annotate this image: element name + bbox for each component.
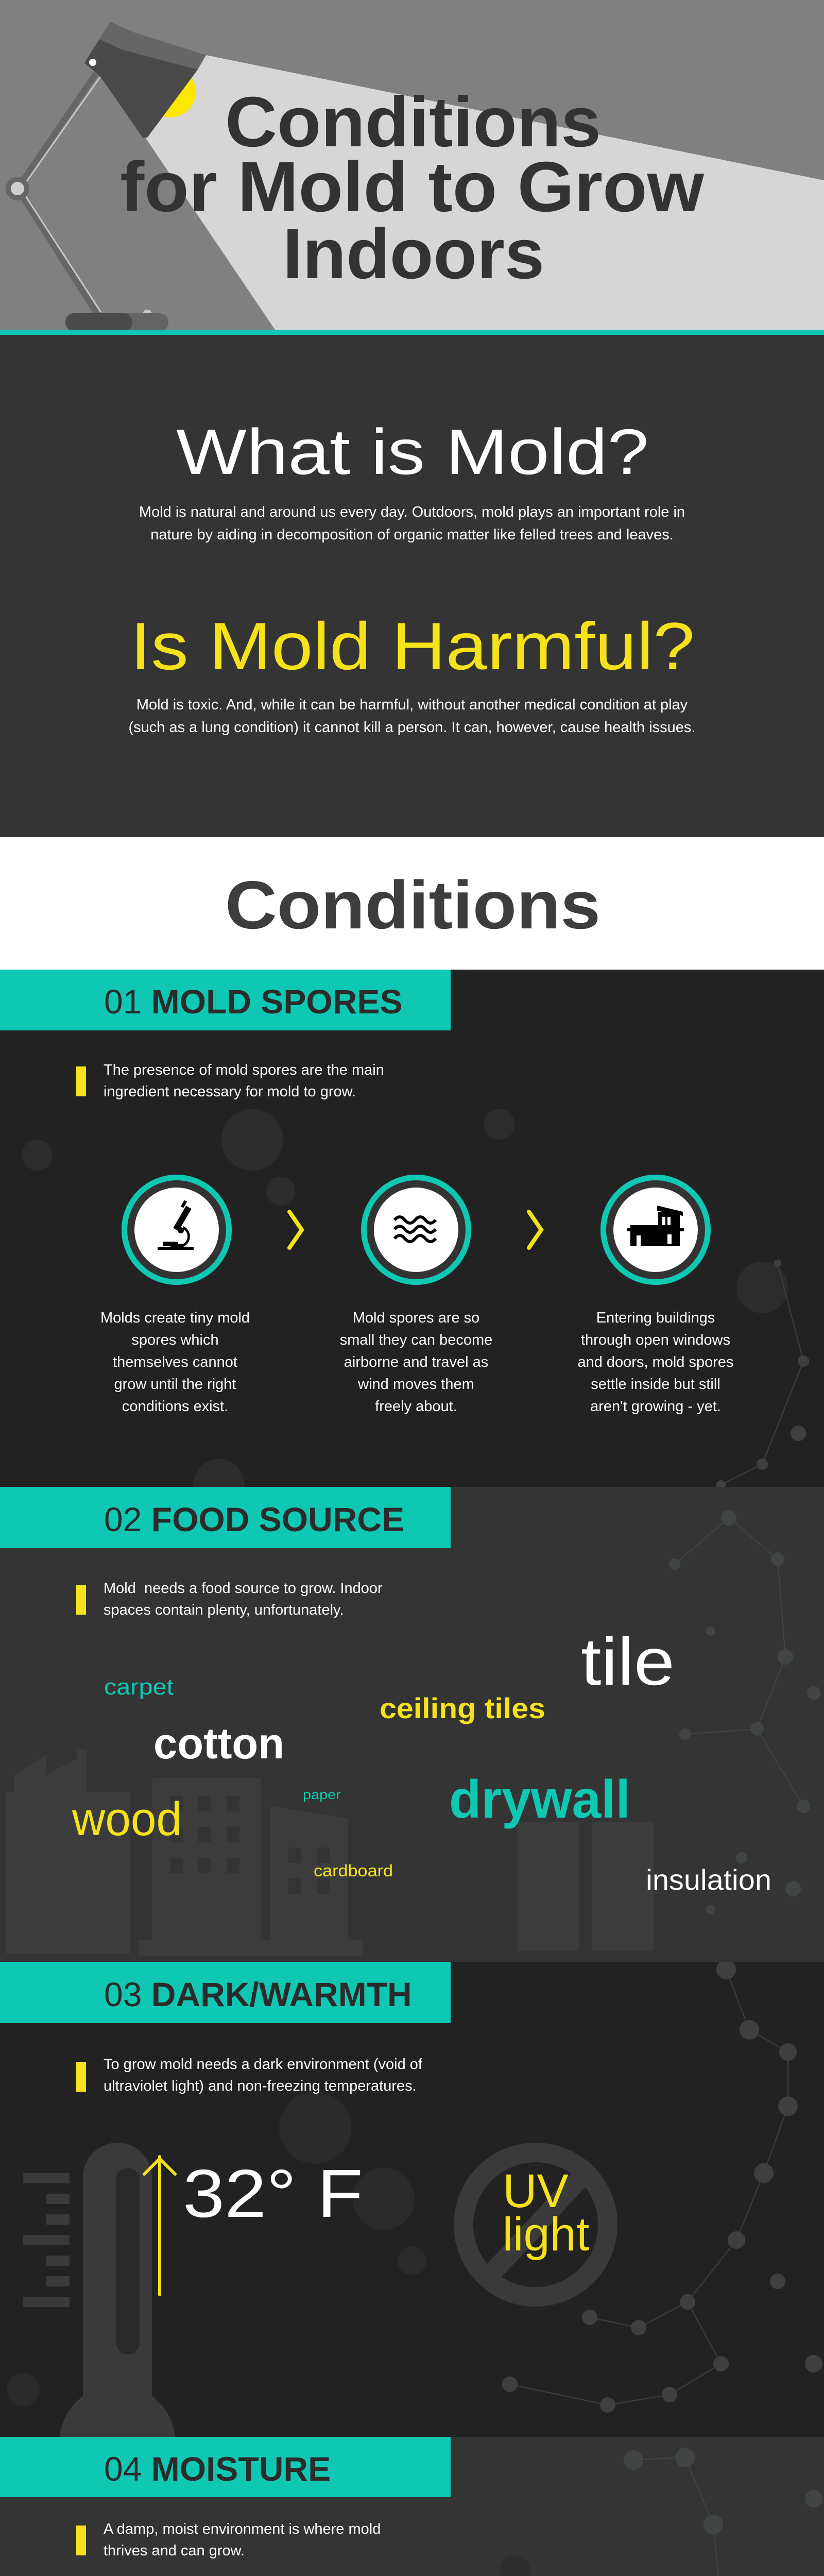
panel: 01 mold spores [0,970,824,1487]
caption 1: themselves cannot [113,1354,237,1370]
caption 1: spores which [131,1332,219,1348]
text: is mold harmful: Mold is toxic. And, while it can be harmful, without another medical condition at play [136,697,688,713]
description [76,1062,384,1100]
word cloud: paper [303,1787,341,1802]
caption 3: through open windows [581,1332,730,1348]
panel: 02 food source [0,1487,824,1962]
conditions heading: Conditions [225,867,600,943]
heading bar: 04 MOISTURE [104,2450,331,2488]
caption 2: Mold spores are so [353,1310,479,1326]
intro panel [0,335,824,837]
caption 1: grow until the right [114,1376,236,1393]
caption 3: Entering buildings [596,1310,715,1326]
text: what is mold: Mold is natural and around us every day. Outdoors, mold plays an important role in [139,504,685,520]
panel: 03 dark/warmth [0,1962,824,2437]
temperature: 32° F [183,2156,363,2231]
icon: no UV: UV [503,2165,569,2217]
caption 2: airborne and travel as [344,1354,488,1370]
title: Conditions [225,82,601,162]
heading bar [0,1487,451,1548]
title [120,82,705,294]
caption 2: wind moves them [358,1376,474,1393]
heading: is mold harmful: Is Mold Harmful? [130,608,695,684]
text: is mold harmful: (such as a lung condition) it cannot kill a person. It can, however, cause health issues. [128,719,695,736]
word cloud: insulation [646,1863,771,1896]
heading bar: 01 MOLD SPORES [104,982,402,1021]
word cloud: tile [581,1624,675,1699]
heading bar: 03 DARK/WARMTH [104,1975,412,2013]
icon: air waves [361,1175,471,1285]
description: Mold needs a food source to grow. Indoor [104,1580,383,1597]
caption 2 [340,1310,492,1415]
header [0,0,824,335]
word cloud: ceiling tiles [380,1692,545,1724]
icon: building [600,1175,711,1285]
description: thrives and can grow. [104,2543,245,2559]
caption 1: Molds create tiny mold [100,1310,250,1326]
icon: no UV [464,2153,608,2297]
description: The presence of mold spores are the main [104,1062,384,1078]
text: is mold harmful [128,697,695,736]
word cloud [72,1624,771,1896]
arrow: chevron 2 [527,1210,544,1250]
heading bar [0,1962,451,2023]
arrow: chevron 1 [287,1210,304,1250]
conditions heading [0,837,824,970]
light beam [145,55,824,331]
heading bar: 02 FOOD SOURCE [104,1500,404,1538]
heading: what is mold: What is Mold? [176,416,649,488]
icon: desk lamp [6,22,206,331]
description: A damp, moist environment is where mold [104,2521,381,2537]
caption 3: settle inside but still [591,1376,720,1393]
caption 1 [100,1310,250,1415]
heading bar [0,970,451,1030]
icon: no UV: light [503,2208,589,2261]
word cloud: cardboard [314,1861,393,1880]
caption 3: aren't growing - yet. [590,1398,721,1415]
description: ingredient necessary for mold to grow. [104,1083,356,1100]
panel: 04 moisture [0,2437,824,2576]
icon: microscope [122,1175,232,1285]
word cloud: carpet [104,1674,174,1700]
description: To grow mold needs a dark environment (void of [104,2056,422,2073]
description [76,2056,422,2094]
heading bar [0,2437,451,2497]
icon: thermometer [23,2143,176,2501]
word cloud: wood [72,1793,182,1845]
description [76,1580,383,1618]
word cloud: cotton [153,1719,284,1768]
caption 2: small they can become [340,1332,492,1348]
caption 1: conditions exist. [122,1398,228,1415]
buildings silhouette [6,1750,654,1956]
caption 3 [577,1310,734,1415]
text: what is mold [139,504,685,543]
caption 2: freely about. [375,1398,457,1415]
title: Indoors [283,214,544,294]
description [76,2521,381,2559]
caption 3: and doors, mold spores [577,1354,734,1370]
description: spaces contain plenty, unfortunately. [104,1602,344,1618]
title: for Mold to Grow [120,147,705,227]
description: ultraviolet light) and non-freezing temperatures. [104,2078,417,2094]
arrow: up [144,2157,175,2295]
word cloud: drywall [449,1770,630,1829]
text: what is mold: nature by aiding in decomposition of organic matter like felled trees and leaves. [150,527,674,543]
